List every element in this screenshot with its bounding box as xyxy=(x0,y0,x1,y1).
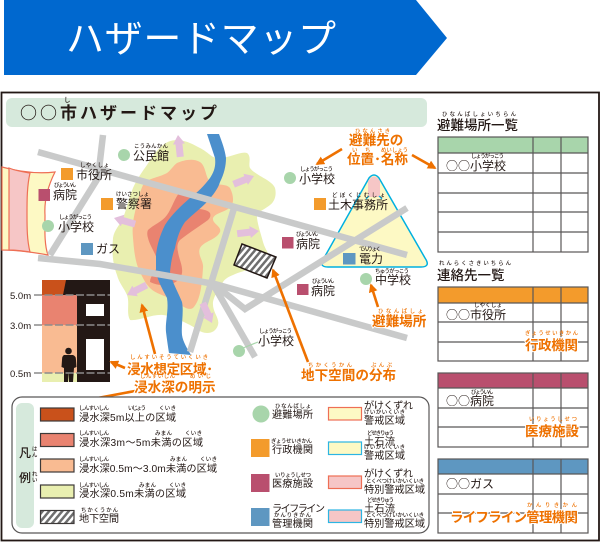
contact table: lifeline agency xyxy=(438,459,588,533)
callout: evacuation site position and name: ひなんさき xyxy=(355,128,390,135)
legend: administrative agency xyxy=(251,437,313,457)
callout: flood assumed area and depth: 浸水深の明示 xyxy=(134,379,216,395)
legend: depth 5m or more: 浸水深5m以上の区域 xyxy=(79,411,176,424)
callout: evacuation site position and name: 避難先の xyxy=(349,132,403,148)
contact table: medical facility: ○○病院 xyxy=(446,392,494,409)
legend: depth under 0.5m: 浸水深0.5m未満の区域 xyxy=(79,487,186,500)
map label: electric power: 電力 xyxy=(359,252,383,266)
map: river xyxy=(156,134,226,355)
callout: flood assumed area and depth: 浸水想定区域･ xyxy=(127,361,213,377)
map: roads xyxy=(38,135,407,357)
heading banner xyxy=(4,0,447,75)
legend: depth 5m or more: くいき xyxy=(159,405,176,412)
legend: landslide warning area: 警戒区域 xyxy=(364,414,405,427)
legend: lifeline agency: 管理機関 xyxy=(272,517,313,530)
contact table: lifeline agency: かんりきかん xyxy=(527,502,578,509)
legend: landslide warning area: けいかいくいき xyxy=(364,409,405,416)
legend: landslide special warning area: がけくずれ xyxy=(364,467,413,480)
legend: lifeline agency xyxy=(251,503,325,530)
icon: person silhouette xyxy=(62,348,76,382)
map label: hospital south xyxy=(297,277,335,298)
legend: administrative agency: 行政機関 xyxy=(272,443,313,456)
legend: depth under 0.5m xyxy=(40,482,186,500)
map label: city hall: 市役所 xyxy=(76,167,112,182)
callout: underground space distribution: ぶんぷ xyxy=(371,362,393,369)
map label: junior high school: ちゅうがっこう xyxy=(375,267,409,275)
callout: evacuation site position and name xyxy=(347,128,408,167)
legend: evacuation site xyxy=(252,402,313,422)
legend: depth under 0.5m: しんすいしん xyxy=(79,482,110,489)
callout: evacuation site position and name: ち xyxy=(365,147,370,154)
flood depth diagram xyxy=(10,280,110,382)
legend: debris flow warning area: けいかいくいき xyxy=(364,444,405,451)
callout: flood assumed area and depth: しんすいそうていくいき xyxy=(130,354,208,361)
legend: debris flow special warning area: 特別警戒区域 xyxy=(364,517,425,530)
map label: hospital west: 病院 xyxy=(53,188,77,202)
legend: landslide special warning area: 特別警戒区域 xyxy=(364,483,425,496)
map label: police station: 警察署 xyxy=(116,196,152,211)
legend: debris flow special warning area: とくべつけいかいくいき xyxy=(366,512,424,519)
evacuation site list heading: 避難場所一覧 xyxy=(437,117,518,133)
map label: hospital south: 病院 xyxy=(311,284,335,298)
map label: elementary school east: 小学校 xyxy=(299,171,335,186)
legend: debris flow warning area: 土石流 xyxy=(364,435,395,448)
map label: hospital south: びょういん xyxy=(312,277,335,285)
legend: depth 3m to 5m: みまん xyxy=(155,430,173,437)
map label: police station xyxy=(101,191,152,211)
contact list heading: れんらくさきいちらん xyxy=(439,260,512,267)
contact table: administrative agency xyxy=(438,287,588,361)
map label: city hall: しやくしょ xyxy=(80,161,109,169)
map label: hospital centre: びょういん xyxy=(296,230,319,238)
callout: evacuation site position and name: い xyxy=(352,147,357,154)
map label: hospital centre: 病院 xyxy=(296,237,320,251)
map label: electric power xyxy=(343,246,383,266)
flood depth diagram: 5.0m xyxy=(10,291,31,302)
legend: depth 3m to 5m xyxy=(40,430,203,449)
legend: underground space: ちかくうかん xyxy=(81,507,119,514)
map label: hospital centre xyxy=(282,230,320,251)
contact table: medical facility: びょういん xyxy=(471,388,494,396)
legend panel xyxy=(12,397,429,533)
callout: evacuation site: 避難場所 xyxy=(372,313,427,329)
legend: evacuation site: ひなんばしょ xyxy=(275,402,311,410)
legend heading: 例 xyxy=(19,471,31,485)
contact list heading: 連絡先一覧 xyxy=(437,267,504,283)
map: debris flow zone triangle xyxy=(322,175,427,267)
map label: gas: ガス xyxy=(96,242,120,256)
contact table: medical facility xyxy=(438,373,588,447)
map title band: ○○市ハザードマップ xyxy=(20,99,220,124)
evacuation site list heading xyxy=(437,110,518,133)
map label: police station: けいさつしょ xyxy=(116,191,149,198)
map label: public works office: どぼくじむしょ xyxy=(332,191,385,199)
contact table: administrative agency: 行政機関 xyxy=(525,337,578,353)
legend: evacuation site: 避難場所 xyxy=(272,408,313,421)
legend: depth 0.5m to 3.0m: みまん xyxy=(170,456,188,463)
flood depth diagram: 3.0m xyxy=(10,321,31,332)
map label: public works office: 土木事務所 xyxy=(328,198,388,212)
legend: landslide special warning area: とくべつけいかいくいき xyxy=(366,478,424,485)
legend: debris flow special warning area: どせきりゅう xyxy=(367,496,394,504)
map label: city hall xyxy=(61,161,112,182)
flood depth diagram: 0.5m xyxy=(10,369,31,380)
map label: elementary school south: しょうがっこう xyxy=(259,327,292,335)
map label: community hall: 公民館 xyxy=(133,149,169,163)
legend: depth 0.5m to 3.0m xyxy=(40,456,217,475)
map label: junior high school xyxy=(360,267,411,287)
contact table: lifeline agency: ○○ガス xyxy=(446,475,494,492)
map: evacuation direction arrows xyxy=(112,134,260,326)
legend heading xyxy=(16,403,38,528)
legend: depth 3m to 5m: くいき xyxy=(185,430,202,437)
contact table: lifeline agency: ライフライン管理機関 xyxy=(450,509,578,525)
callout arrows xyxy=(71,149,435,403)
map label: elementary school south: 小学校 xyxy=(258,333,294,348)
contact table: medical facility: 医療施設 xyxy=(525,423,579,439)
legend: medical facility: いりょうしせつ xyxy=(275,472,311,479)
map label: elementary school east xyxy=(284,165,335,186)
legend: debris flow special warning area xyxy=(328,496,425,530)
map label: electric power: でんりょく xyxy=(359,246,381,253)
legend: medical facility xyxy=(251,472,313,492)
legend: landslide special warning area xyxy=(328,467,425,496)
evacuation site table xyxy=(438,137,588,252)
callout: underground space distribution: ちかくうかん xyxy=(308,362,353,369)
legend: underground space xyxy=(40,507,119,525)
map label: elementary school west xyxy=(42,213,94,234)
map label: public works office xyxy=(314,191,388,212)
map label: community hall xyxy=(118,143,169,163)
legend: depth 0.5m to 3.0m: 浸水深0.5m～3.0m未満の区域 xyxy=(79,462,217,475)
evacuation site table: しょうがっこう xyxy=(471,152,504,160)
legend heading: い xyxy=(32,477,37,484)
callout: underground space distribution: 地下空間の分布 xyxy=(301,367,396,383)
map label: community hall: こうみんかん xyxy=(134,143,169,150)
legend: landslide warning area xyxy=(328,399,413,427)
contact table: administrative agency: ○○市役所 xyxy=(446,306,506,323)
callout: flood assumed area and depth: しんすいしん xyxy=(140,373,176,380)
legend: depth 5m or more xyxy=(40,405,176,424)
legend: depth 5m or more: しんすいしん xyxy=(79,405,110,412)
map label: hospital west xyxy=(38,181,77,202)
legend: lifeline agency: かんりきかん xyxy=(274,512,312,519)
map title band: し xyxy=(64,96,70,104)
legend: depth 0.5m to 3.0m: しんすいしん xyxy=(79,456,110,463)
legend: debris flow special warning area: 土石流 xyxy=(364,502,395,515)
map label: elementary school west: しょうがっこう xyxy=(59,213,92,221)
legend: underground space: 地下空間 xyxy=(79,512,119,525)
callout: evacuation site xyxy=(372,307,427,329)
legend: debris flow warning area: どせきりゅう xyxy=(367,429,394,437)
legend: debris flow warning area: 警戒区域 xyxy=(364,449,405,462)
legend: depth 0.5m to 3.0m: くいき xyxy=(200,456,217,463)
callout: evacuation site: ひなんばしょ xyxy=(378,307,423,315)
legend: landslide warning area: がけくずれ xyxy=(364,399,413,412)
map: hazard zone on left edge xyxy=(2,167,55,255)
map label: hospital west: びょういん xyxy=(54,181,77,189)
map: underground space xyxy=(234,244,276,278)
callout: flood assumed area and depth: めいじ xyxy=(190,373,211,380)
contact list heading xyxy=(437,260,512,283)
legend: depth under 0.5m: くいき xyxy=(169,482,186,489)
contact table: medical facility: いりょうしせつ xyxy=(529,416,577,423)
callout: evacuation site position and name: めいしょう xyxy=(381,147,408,154)
map label: elementary school west: 小学校 xyxy=(58,219,94,234)
map label: elementary school east: しょうがっこう xyxy=(300,165,333,173)
map title band xyxy=(6,96,427,127)
legend: administrative agency: ぎょうせいきかん xyxy=(271,437,313,445)
legend: depth 5m or more: いじょう xyxy=(128,405,146,412)
evacuation site table: ○○小学校 xyxy=(446,157,506,174)
legend: depth 3m to 5m: 浸水深3m～5m未満の区域 xyxy=(79,436,203,449)
map label: elementary school south xyxy=(233,327,294,357)
callout: flood assumed area and depth xyxy=(127,354,216,395)
callout: evacuation site position and name: 位置･名称 xyxy=(347,151,408,167)
legend heading: れ xyxy=(32,471,38,478)
evacuation site list heading: ひなんばしょいちらん xyxy=(442,110,517,118)
map label: gas xyxy=(81,242,120,256)
legend heading: は xyxy=(32,446,38,453)
legend: medical facility: 医療施設 xyxy=(272,477,313,490)
legend: depth under 0.5m: みまん xyxy=(139,482,157,489)
legend heading: 凡 xyxy=(19,446,31,460)
legend: lifeline agency: ライフライン xyxy=(272,503,325,515)
map: flood zones xyxy=(112,140,276,333)
contact table: administrative agency: ぎょうせいきかん xyxy=(525,329,579,337)
map label: junior high school: 中学校 xyxy=(375,272,411,287)
contact table: administrative agency: しやくしょ xyxy=(474,301,502,309)
legend: depth 3m to 5m: しんすいしん xyxy=(79,430,110,437)
legend: debris flow warning area xyxy=(328,429,405,462)
heading banner: ハザードマップ xyxy=(66,19,336,61)
legend heading: ん xyxy=(32,452,38,459)
